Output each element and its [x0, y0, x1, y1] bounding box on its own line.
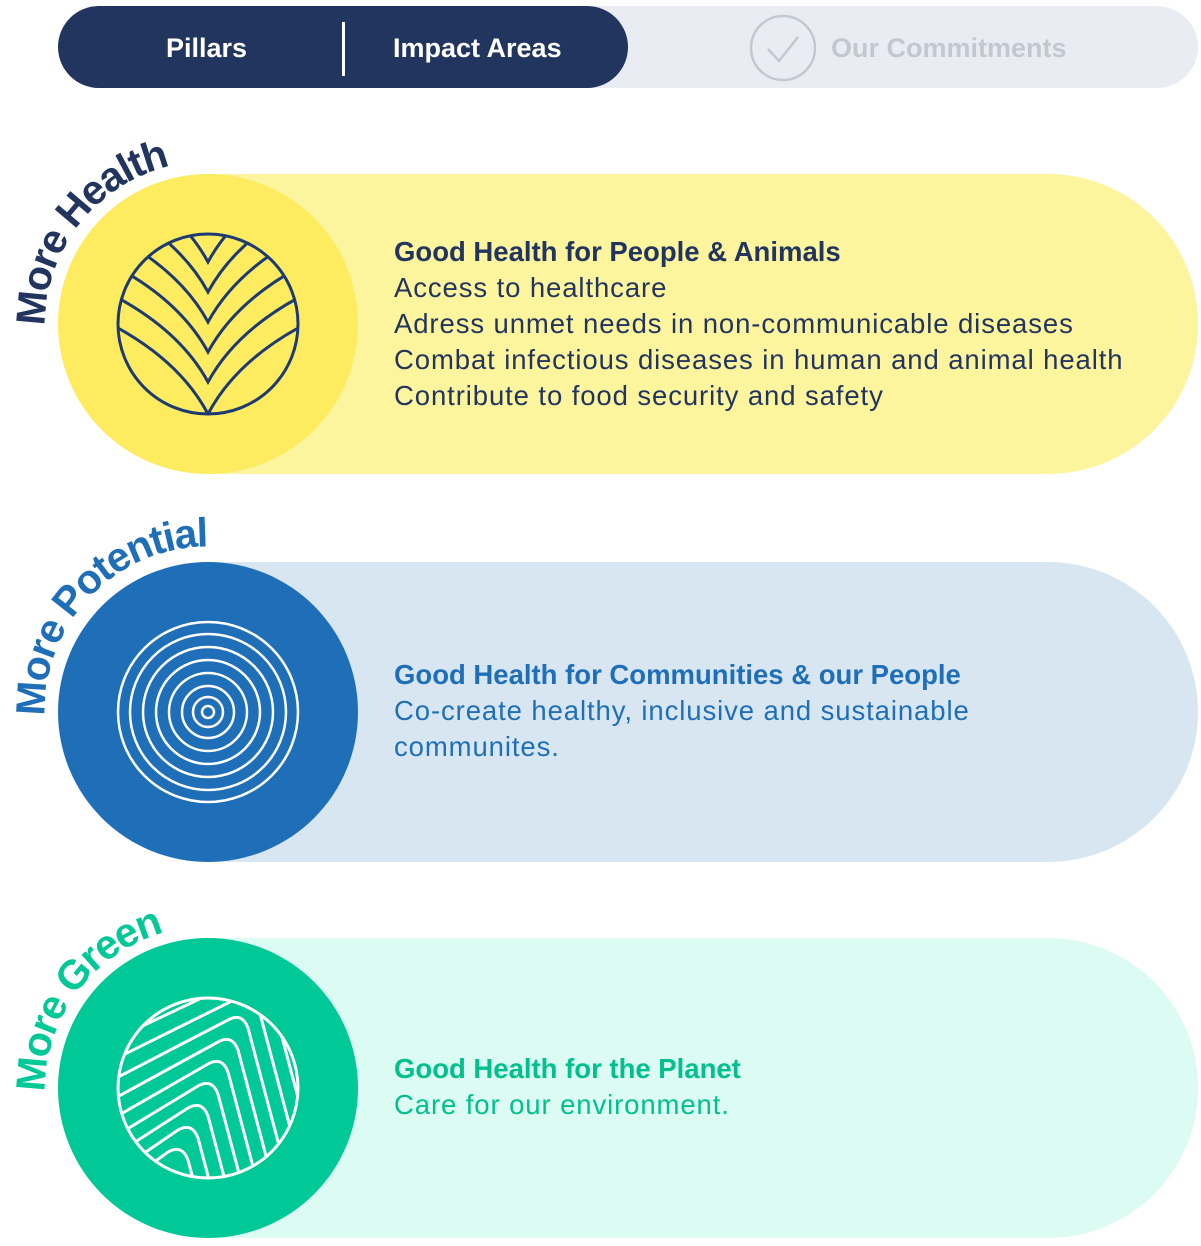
- text: health impact areas: [394, 236, 1124, 411]
- panel: More Potential: [16, 516, 1198, 862]
- tab bar background: [58, 6, 1198, 88]
- text: green impact areas: [394, 1053, 741, 1120]
- icon: concentric circles: [16, 516, 358, 862]
- label: More Green: More Green: [16, 914, 162, 1090]
- text: green impact areas: Care for our environment.: [394, 1089, 730, 1120]
- text: health impact areas: Access to healthcare: [394, 272, 667, 303]
- panel: More Health: [16, 142, 1198, 474]
- text: health impact areas: Combat infectious diseases in human and animal health: [394, 344, 1124, 375]
- tab: Our Commitments: Our Commitments: [831, 33, 1067, 63]
- text: health impact areas: Adress unmet needs in non-communicable diseases: [394, 308, 1074, 339]
- navigation bar: [58, 6, 1198, 88]
- text: health impact areas: Good Health for People & Animals: [394, 236, 841, 267]
- text: potential impact areas: Co-create healthy, inclusive and sustainable: [394, 695, 970, 726]
- text: potential impact areas: Good Health for Communities & our People: [394, 659, 961, 690]
- panel: More Green: [16, 914, 1198, 1238]
- icon: check circle: [750, 14, 816, 82]
- active tabs pill: [58, 6, 628, 88]
- tab: Impact Areas: Impact Areas: [393, 33, 562, 63]
- icon: planet lines: [16, 914, 358, 1238]
- text: green impact areas: Good Health for the Planet: [394, 1053, 741, 1084]
- label: More Health: More Health: [16, 142, 168, 324]
- text: potential impact areas: communites.: [394, 731, 560, 762]
- text: potential impact areas: [394, 659, 970, 762]
- tab: Pillars: Pillars: [166, 33, 247, 63]
- icon: leaf circle: [16, 142, 358, 474]
- label: More Potential: More Potential: [16, 516, 206, 714]
- text: health impact areas: Contribute to food security and safety: [394, 380, 884, 411]
